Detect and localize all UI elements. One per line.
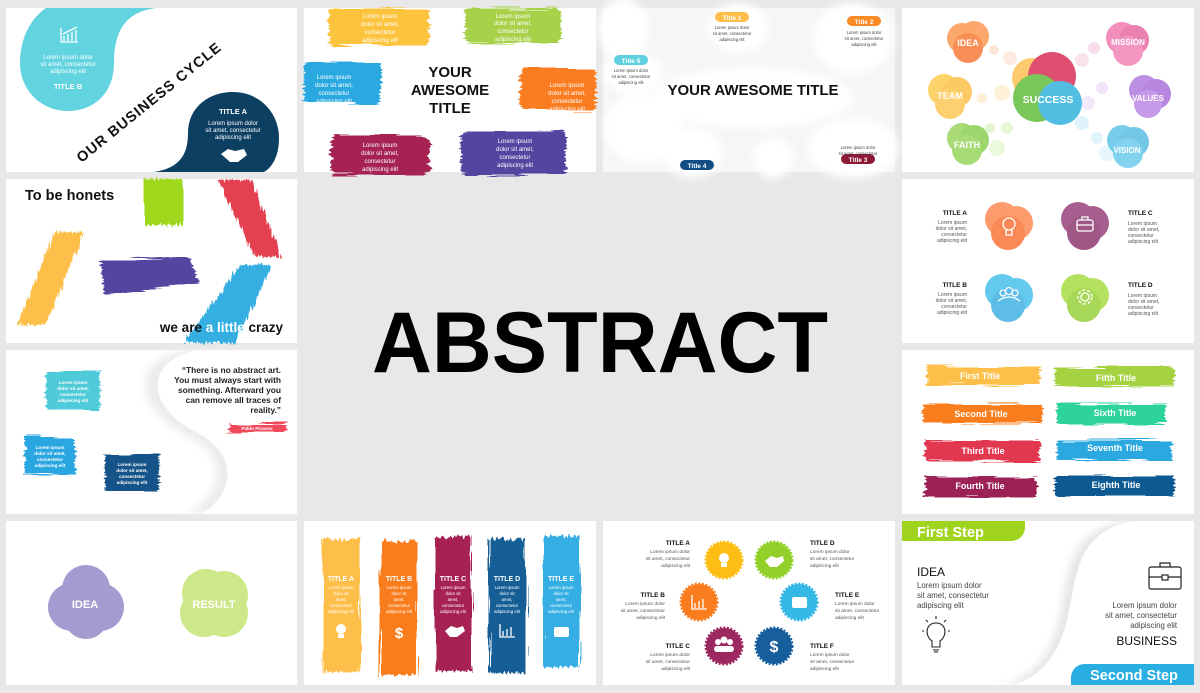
panel: four titles circles: TITLE A: [943, 210, 967, 217]
panel: steps: sit amet, consectetur: [1105, 611, 1177, 620]
panel: brush text boxes: consectetur: [497, 29, 529, 35]
pills: [614, 12, 881, 170]
panel: four titles circles: [902, 179, 1194, 343]
cyan blob title B: Lorem ipsum dolor: [43, 55, 93, 61]
panel: steps: IDEA: [917, 565, 945, 579]
panel: steps: adipiscing elit: [1130, 621, 1178, 630]
panel: steps: Lorem ipsum dolor: [1112, 601, 1177, 610]
panel: quote: Pablo Picasso: [241, 426, 273, 431]
navy blob title A: adipiscing elit: [215, 135, 251, 141]
panel: brush text boxes: adipiscing elit: [362, 38, 398, 44]
panel: four titles circles: dolor sit amet,: [936, 226, 967, 232]
icon: briefcase: [1149, 563, 1181, 589]
panel: vertical brushes: amet,: [448, 597, 458, 602]
panel: badges: adipiscing elit: [661, 563, 691, 569]
panel: badges: sit amet, consectetur: [835, 608, 880, 614]
panel: steps: sit amet, consectetur: [917, 591, 989, 600]
quote text: You must always start with: [174, 375, 281, 385]
panel: quote: Lorem ipsum: [118, 462, 146, 467]
panel: badges: Lorem ipsum dolor: [625, 601, 665, 607]
panel: vertical brushes: $: [395, 625, 404, 642]
pills: Title 5: [622, 58, 641, 65]
panel: vertical brushes: Lorem ipsum: [495, 585, 520, 590]
panel: four titles circles: Lorem ipsum: [938, 220, 967, 226]
panel: badges: sit amet, consectetur: [810, 556, 855, 562]
panel: badges: sit amet, consectetur: [646, 556, 690, 562]
title: YOUR AWESOME TITLE: [667, 82, 839, 99]
panel: four titles circles: TITLE D: [1128, 282, 1153, 289]
tab: second step: Second Step: [1090, 668, 1178, 684]
panel: vertical brushes: TITLE A: [328, 576, 354, 583]
panel: quote: consectetur: [119, 474, 145, 479]
circle group: FAITH: [947, 123, 989, 165]
tab: first step: First Step: [917, 525, 984, 541]
panel: vertical brushes: consectetur: [330, 603, 353, 608]
panel: badges: adipiscing elit: [810, 666, 839, 672]
panel: vertical brushes: amet,: [556, 597, 566, 602]
panel: brush text boxes: Lorem ipsum: [363, 143, 397, 149]
rotated title: OUR BUSINESS CYCLE: [74, 40, 225, 166]
panel: awesome title pills: sit amet, consectetur: [612, 74, 651, 79]
panel: vertical brushes: adipiscing elit: [494, 609, 521, 614]
panel: vertical brushes: dolor sit: [391, 591, 407, 596]
circle group: IDEA: [947, 21, 989, 63]
panel: awesome title pills: adipiscing elit: [719, 37, 745, 42]
panel: badges: Lorem ipsum dolor: [810, 549, 850, 555]
panel: badges: TITLE E: [835, 592, 860, 599]
pills: Title 1: [723, 15, 742, 22]
text: we are a little crazy: we are a little crazy: [159, 320, 283, 335]
panel: brush text boxes: dolor sit amet,: [494, 21, 532, 27]
panel: vertical brushes: dolor sit: [553, 591, 569, 596]
panel: four titles circles: Lorem ipsum: [1128, 221, 1157, 227]
panel: success circles: FAITH: [954, 140, 980, 150]
tab: first step: [902, 521, 1025, 541]
panel: brush text boxes: adipiscing elit: [362, 167, 398, 173]
quote text: [174, 365, 281, 415]
panel: quote: Lorem ipsum: [59, 380, 87, 385]
panel: vertical brushes: consectetur: [496, 603, 519, 608]
panel: awesome title pills: sit amet, consectetur: [839, 151, 878, 156]
pills: Title 3: [849, 157, 868, 164]
panel: brush titles: Sixth Title: [1094, 408, 1136, 418]
panel: quote: dolor sit amet,: [34, 451, 66, 456]
circle group: TEAM: [928, 74, 972, 119]
panel: awesome title pills: adipiscing elit: [851, 42, 877, 47]
panel: idea result: RESULT: [192, 599, 236, 611]
panel: brush text boxes: consectetur: [551, 99, 583, 105]
panel: quote: adipiscing elit: [35, 463, 66, 468]
panel: quote: dolor sit amet,: [57, 386, 89, 391]
panel: badges: adipiscing elit: [835, 615, 864, 621]
panel: four titles circles: Lorem ipsum: [938, 292, 967, 298]
panel: awesome title pills: adipiscing elit: [618, 80, 644, 85]
text: to be honets: To be honets: [25, 188, 114, 204]
navy blob title A: TITLE A: [219, 107, 248, 116]
panel: brush titles: [902, 350, 1194, 514]
panel: badges: TITLE F: [810, 643, 834, 650]
panel: vertical brushes: adipiscing elit: [440, 609, 467, 614]
panel: success circles: VISION: [1113, 146, 1141, 155]
panel: brush titles: Fourth Title: [955, 481, 1005, 491]
pills: Title 4: [688, 163, 707, 170]
panel: badges: Lorem ipsum dolor: [650, 652, 690, 658]
panel: badges: TITLE A: [666, 540, 690, 547]
panel: brush text boxes: Lorem ipsum: [498, 139, 532, 145]
panel: badges: sit amet, consectetur: [621, 608, 665, 614]
panel: quote: adipiscing elit: [58, 398, 89, 403]
pills: Title 2: [855, 19, 874, 26]
panel: awesome title pills: Lorem ipsum dolor: [614, 68, 649, 73]
panel: to be honets: [6, 179, 297, 343]
panel: quote: adipiscing elit: [117, 480, 148, 485]
panel: brush text boxes: consectetur: [364, 30, 396, 36]
panel: vertical brushes: adipiscing elit: [386, 609, 413, 614]
panel: badges: Lorem ipsum dolor: [810, 652, 850, 658]
panel: vertical brushes: consectetur: [388, 603, 411, 608]
panel: four titles circles: consectetur: [941, 304, 967, 310]
panel: vertical brushes: Lorem ipsum: [441, 585, 466, 590]
panel: brush text boxes: [304, 8, 596, 175]
panel: badges: TITLE C: [665, 643, 690, 650]
panel: brush text boxes: dolor sit amet,: [548, 91, 586, 97]
panel: brush text boxes: dolor sit amet,: [496, 147, 534, 153]
panel: vertical brushes: dolor sit: [499, 591, 515, 596]
cyan blob title B: TITLE B: [54, 82, 83, 91]
navy blob title A: [154, 92, 279, 172]
title: [411, 64, 489, 117]
panel: brush text boxes: dolor sit amet,: [315, 83, 353, 89]
navy blob title A: sit amet, consectetur: [205, 128, 261, 134]
panel: brush text boxes: Lorem ipsum: [496, 14, 530, 20]
panel: success circles: MISSION: [1111, 38, 1145, 47]
panel: brush titles: Third Title: [961, 446, 1005, 456]
panel: brush text boxes: consectetur: [364, 159, 396, 165]
panel: quote: [6, 350, 297, 514]
panel: vertical brushes: Lorem ipsum: [387, 585, 412, 590]
circle group: MISSION: [1106, 22, 1149, 66]
panel: vertical brushes: consectetur: [550, 603, 573, 608]
panel: brush text boxes: dolor sit amet,: [361, 22, 399, 28]
navy blob title A: Lorem ipsum dolor: [208, 121, 258, 127]
cyan blob title B: adipiscing elit: [50, 69, 86, 75]
panel: success circles: [902, 8, 1194, 172]
panel: idea result: IDEA: [72, 599, 98, 611]
panel: success circles: IDEA: [957, 38, 979, 48]
panel: vertical brushes: [304, 521, 596, 685]
panel: idea result: [6, 521, 297, 685]
title: YOUR: [428, 64, 472, 81]
panel: vertical brushes: dolor sit: [445, 591, 461, 596]
quote text: “There is no abstract art.: [182, 365, 281, 375]
panel: vertical brushes: adipiscing elit: [328, 609, 355, 614]
quote text: reality.”: [250, 405, 281, 415]
panel: brush text boxes: consectetur: [318, 91, 350, 97]
panel: awesome title pills: sit amet, consectetur: [845, 36, 884, 41]
panel: four titles circles: dolor sit amet,: [1128, 299, 1159, 305]
panel: four titles circles: TITLE B: [942, 282, 967, 289]
panel: brush text boxes: Lorem ipsum: [317, 75, 351, 81]
panel: four titles circles: consectetur: [1128, 305, 1154, 311]
panel: four titles circles: adipiscing elit: [937, 310, 968, 316]
panel: quote: consectetur: [37, 457, 63, 462]
panel: vertical brushes: TITLE B: [386, 576, 412, 583]
panel: brush text boxes: consectetur: [499, 155, 531, 161]
cyan blob title B: sit amet, consectetur: [40, 62, 96, 68]
panel: success circles: SUCCESS: [1023, 94, 1073, 106]
panel: steps: adipiscing elit: [917, 601, 965, 610]
panel: brush titles: Second Title: [954, 409, 1008, 419]
panel: brush text boxes: Lorem ipsum: [550, 83, 584, 89]
panel: brush titles: Fifth Title: [1096, 373, 1136, 383]
panel: badges: $: [770, 639, 779, 656]
panel: four titles circles: consectetur: [1128, 233, 1154, 239]
panel: badges: adipiscing elit: [810, 563, 839, 569]
panel: four titles circles: adipiscing elit: [937, 238, 968, 244]
panel: badges: sit amet, consectetur: [646, 659, 690, 665]
panel: vertical brushes: consectetur: [442, 603, 465, 608]
panel: quote: dolor sit amet,: [116, 468, 148, 473]
panel: steps: Lorem ipsum dolor: [917, 581, 982, 590]
panel: badges: sit amet, consectetur: [810, 659, 855, 665]
panel: vertical brushes: Lorem ipsum: [549, 585, 574, 590]
panel: badges: adipiscing elit: [636, 615, 666, 621]
panel: success circles: VALUES: [1132, 94, 1165, 103]
panel: vertical brushes: amet,: [336, 597, 346, 602]
panel: brush text boxes: Lorem ipsum: [363, 14, 397, 20]
panel: brush text boxes: adipiscing elit: [495, 37, 531, 43]
panel: brush text boxes: dolor sit amet,: [361, 151, 399, 157]
icon: bulb: [922, 616, 950, 652]
circle group: SUCCESS: [1012, 52, 1082, 125]
title: TITLE: [429, 100, 471, 117]
panel: badges: Lorem ipsum dolor: [835, 601, 875, 607]
panel: awesome title pills: [598, 0, 898, 178]
panel: badges: adipiscing elit: [661, 666, 691, 672]
circle group: VISION: [1107, 125, 1149, 168]
panel: steps: BUSINESS: [1116, 634, 1177, 648]
panel: steps: [902, 521, 1194, 685]
panel: four titles circles: consectetur: [941, 232, 967, 238]
title: AWESOME: [411, 82, 489, 99]
panel: vertical brushes: TITLE E: [548, 576, 574, 583]
panel: badges: TITLE B: [640, 592, 665, 599]
panel: brush titles: Eighth Title: [1092, 480, 1140, 490]
panel: brush text boxes: adipiscing elit: [497, 163, 533, 169]
center title: ABSTRACT: [372, 295, 828, 391]
panel: awesome title pills: sit amet, consectetur: [713, 31, 752, 36]
panel: vertical brushes: adipiscing elit: [548, 609, 575, 614]
quote text: something. Afterward you: [178, 385, 281, 395]
panel: badges: TITLE D: [810, 540, 835, 547]
panel: vertical brushes: TITLE C: [440, 576, 466, 583]
panel: vertical brushes: amet,: [502, 597, 512, 602]
quote text: can remove all traces of: [186, 395, 281, 405]
panel: brush text boxes: adipiscing elit: [549, 107, 585, 113]
circle group: VALUES: [1129, 75, 1171, 118]
panel: four titles circles: dolor sit amet,: [936, 298, 967, 304]
panel: brush text boxes: adipiscing elit: [316, 99, 352, 105]
panel: four titles circles: dolor sit amet,: [1128, 227, 1159, 233]
panel: brush titles: Seventh Title: [1087, 443, 1143, 453]
panel: four titles circles: TITLE C: [1128, 210, 1153, 217]
panel: badges: [603, 521, 895, 685]
tab: second step: [1071, 664, 1194, 685]
panel: four titles circles: Lorem ipsum: [1128, 293, 1157, 299]
panel: four titles circles: adipiscing elit: [1128, 239, 1159, 245]
panel: badges: Lorem ipsum dolor: [650, 549, 690, 555]
panel: awesome title pills: Lorem ipsum dolor: [841, 145, 876, 150]
panel: brush titles: First Title: [960, 371, 1000, 381]
cyan blob title B: [20, 8, 156, 111]
panel: four titles circles: adipiscing elit: [1128, 311, 1159, 317]
panel: vertical brushes: Lorem ipsum: [329, 585, 354, 590]
panel: awesome title pills: Lorem ipsum dolor: [847, 30, 882, 35]
panel: vertical brushes: amet,: [394, 597, 404, 602]
panel: vertical brushes: TITLE D: [494, 576, 520, 583]
panel: success circles: TEAM: [937, 91, 963, 101]
panel: quote: Lorem ipsum: [36, 445, 64, 450]
panel: vertical brushes: dolor sit: [333, 591, 349, 596]
panel: business cycle: [6, 8, 297, 172]
panel: awesome title pills: Lorem ipsum dolor: [715, 25, 750, 30]
panel: quote: consectetur: [60, 392, 86, 397]
